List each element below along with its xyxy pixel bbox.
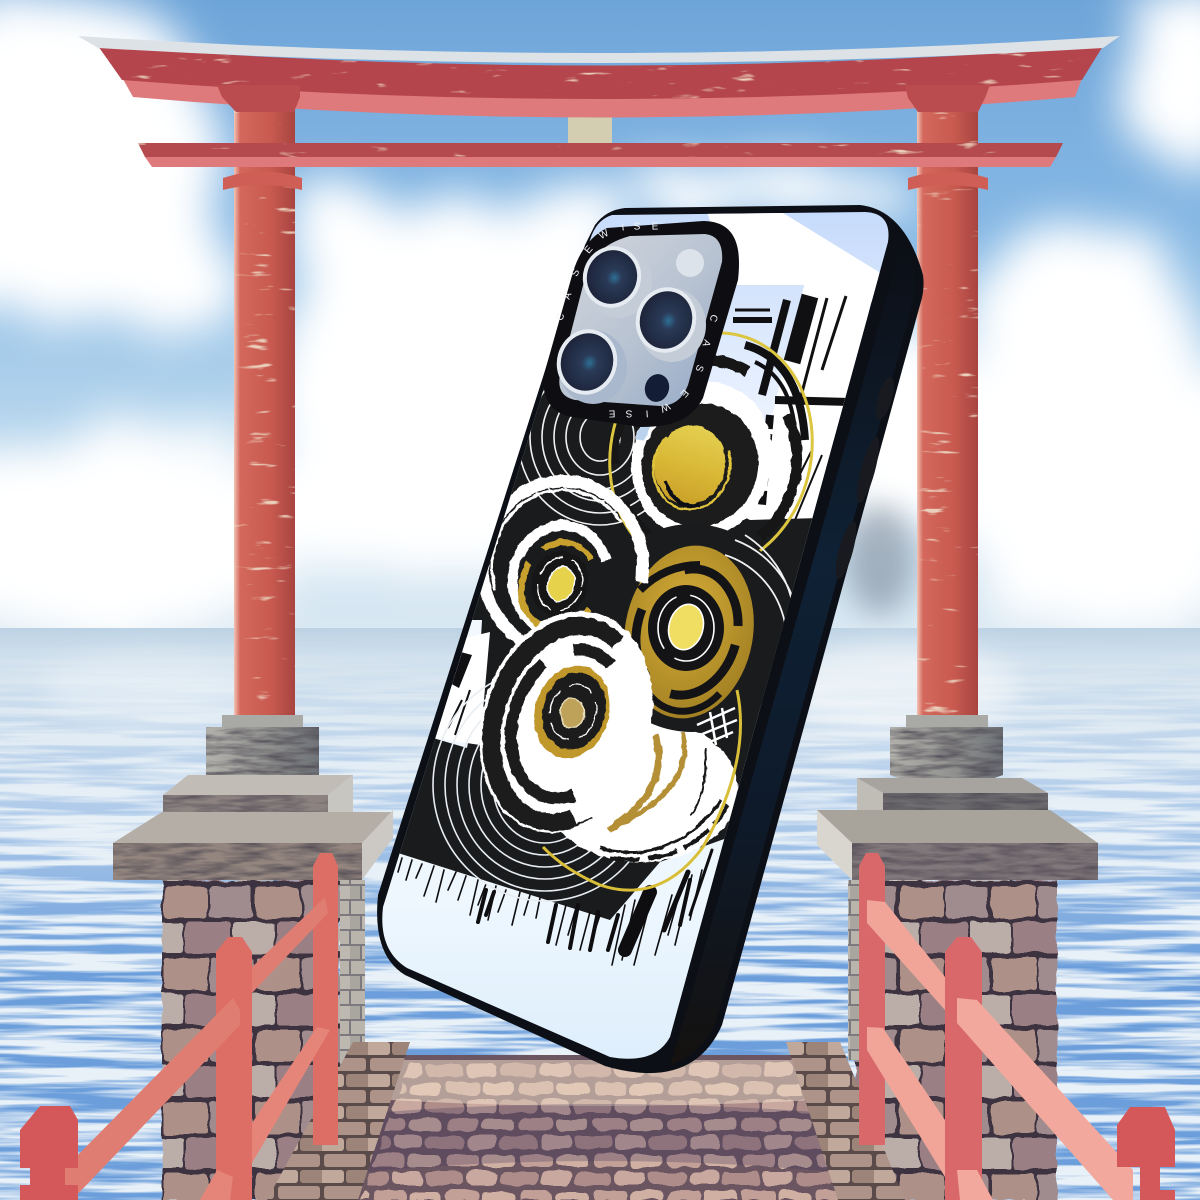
middle post bbox=[216, 937, 252, 1200]
left pedestal bbox=[113, 715, 393, 1200]
left collar bbox=[223, 172, 302, 190]
lower rail near bbox=[200, 1170, 233, 1200]
left dry-brush streaks bbox=[448, 690, 470, 735]
right kerb bbox=[786, 1042, 905, 1200]
artwork base bbox=[370, 205, 900, 1075]
brand text on camera ring: S bbox=[625, 407, 633, 419]
right gold swirl bbox=[624, 524, 792, 732]
brand text on camera ring: A bbox=[700, 338, 712, 348]
upper rail near bbox=[957, 998, 1133, 1200]
upper beam bbox=[98, 46, 1103, 99]
grey cloud shadow behind phone bbox=[846, 505, 914, 615]
right brick column bbox=[848, 880, 1057, 1200]
lower rail near bbox=[957, 1170, 993, 1200]
top left concentric circles bbox=[520, 390, 645, 526]
walkway backing bbox=[350, 1055, 850, 1200]
lens one bbox=[575, 239, 652, 318]
left kerb bbox=[267, 1042, 410, 1200]
upper brush strokes bbox=[733, 296, 850, 520]
brand text on camera ring: E bbox=[608, 407, 616, 419]
lens three bbox=[549, 322, 627, 404]
brand text on camera ring: C bbox=[707, 313, 719, 323]
brand text on camera ring: E bbox=[677, 387, 690, 399]
lower beam bbox=[138, 143, 1063, 157]
camera plate bbox=[559, 234, 722, 406]
brand text on camera ring: C bbox=[555, 312, 567, 322]
upper rail far bbox=[867, 900, 945, 1010]
clouds bbox=[0, 0, 1200, 640]
top swirl with gold center bbox=[612, 360, 797, 556]
left white streak patch bbox=[433, 632, 490, 745]
stone walkway bbox=[267, 1042, 905, 1200]
brand text on camera ring: S bbox=[570, 267, 583, 278]
brand text on camera ring: E bbox=[651, 221, 659, 233]
near post bbox=[20, 1106, 78, 1200]
right pillar bbox=[917, 100, 978, 718]
central support post bbox=[568, 103, 612, 143]
brand text on camera ring: S bbox=[633, 221, 641, 233]
case side panel bbox=[670, 225, 915, 1065]
far post bbox=[859, 853, 885, 1145]
lower rail far bbox=[252, 1027, 330, 1163]
left swirl with gold center bbox=[483, 481, 643, 653]
sky background bbox=[0, 0, 1200, 640]
upper right white block bbox=[745, 282, 875, 525]
white top band bbox=[708, 213, 880, 302]
right upper plinth bbox=[857, 778, 1048, 835]
near post bbox=[1117, 1107, 1175, 1200]
right upper cap bbox=[905, 85, 990, 112]
lower left concentric circles bbox=[432, 682, 630, 902]
lidar sensor bbox=[641, 371, 673, 405]
right column base bbox=[906, 715, 988, 729]
sea bbox=[0, 628, 1200, 1200]
camera surround bbox=[543, 221, 739, 427]
torii gate bbox=[78, 36, 1120, 718]
shadow band bbox=[365, 1104, 835, 1172]
flash bbox=[676, 249, 704, 277]
beam top edge bbox=[78, 36, 1120, 63]
back artwork bbox=[370, 205, 900, 1075]
central black block bbox=[398, 380, 818, 920]
bottom brush streaks bbox=[398, 850, 712, 965]
far post bbox=[313, 853, 338, 1145]
left upper plinth bbox=[163, 775, 353, 834]
left black bar bbox=[452, 652, 472, 688]
brand text on camera ring: E bbox=[583, 244, 596, 256]
upper beam underside bbox=[118, 70, 1085, 118]
lens two bbox=[628, 280, 706, 362]
brand text on camera ring: W bbox=[597, 228, 611, 242]
right railing bbox=[859, 853, 1175, 1200]
main large swirl bbox=[479, 610, 654, 834]
left lower slab bbox=[113, 810, 393, 880]
brand text on camera ring: I bbox=[645, 407, 649, 419]
lower rail far bbox=[867, 1027, 945, 1177]
phone case bbox=[370, 205, 924, 1075]
side buttons bbox=[831, 375, 897, 581]
right lower slab bbox=[817, 810, 1098, 880]
brand text on camera ring: W bbox=[658, 400, 672, 414]
white grid strokes bbox=[697, 708, 737, 745]
brand text on camera ring bbox=[555, 221, 719, 419]
left railing bbox=[20, 853, 338, 1200]
left pillar bbox=[234, 100, 295, 718]
brand text on camera ring: I bbox=[621, 222, 625, 234]
case body silhouette bbox=[377, 205, 924, 1073]
lower beam underside bbox=[145, 157, 1056, 167]
middle post bbox=[945, 937, 982, 1200]
sunlit band bbox=[390, 1060, 815, 1106]
left column base bbox=[222, 715, 303, 729]
lower right white swirl bbox=[561, 723, 738, 863]
right pedestal bbox=[817, 715, 1098, 1200]
camera bumper bbox=[543, 221, 739, 427]
upper rail far bbox=[252, 897, 328, 993]
lower gold ring bbox=[543, 690, 741, 890]
large gold ring upper bbox=[608, 332, 814, 552]
brand text on camera ring: A bbox=[562, 291, 574, 301]
left upper cap bbox=[217, 85, 300, 112]
upper rail near bbox=[50, 998, 240, 1200]
left brick column bbox=[162, 880, 365, 1200]
right collar bbox=[908, 172, 988, 190]
brand text on camera ring: S bbox=[693, 363, 705, 373]
cobblestones bbox=[360, 1060, 842, 1200]
